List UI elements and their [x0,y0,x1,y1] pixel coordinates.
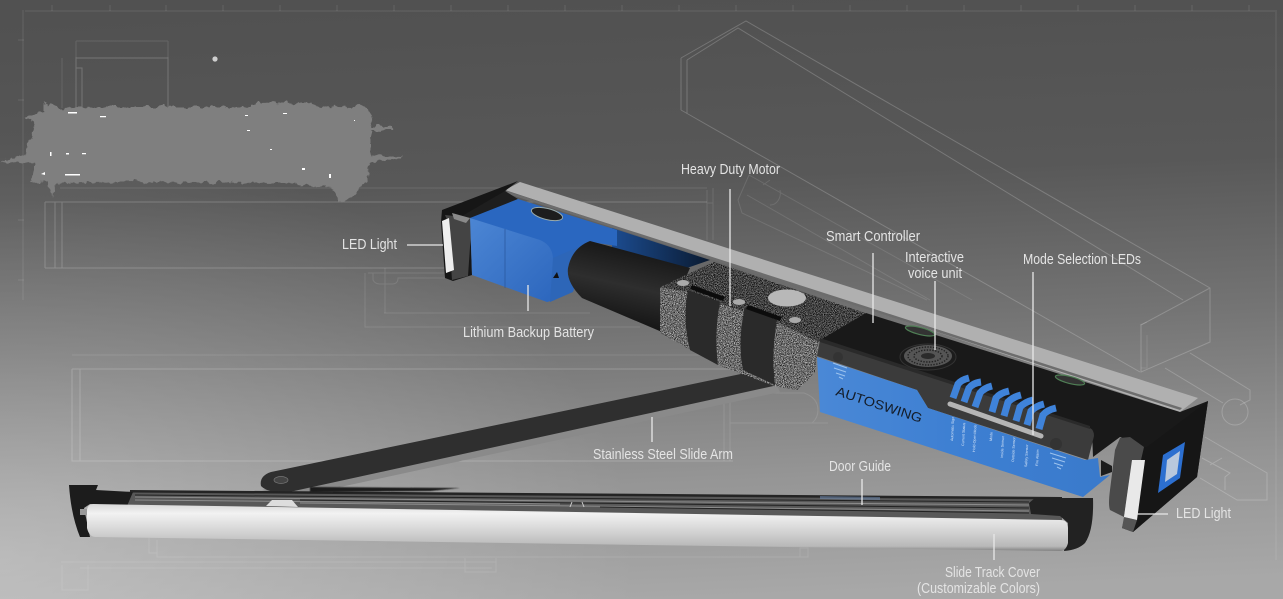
slide track: right end cap [1029,498,1093,551]
mode selection LED tabs [953,378,1056,429]
slide track: inner door guide [127,487,1062,525]
label: LED Light (left) [342,236,443,253]
mode selection LED bar [950,404,1041,436]
green indicators [905,324,1085,387]
label: Stainless Steel Slide Arm: Stainless Steel Slide Arm [593,446,733,463]
erased title area: grey blotch [0,56,402,202]
gearbox block with bands [660,262,868,390]
slide track: left end cap [69,485,133,537]
label: Door Guide [829,458,891,505]
label: Door Guide: Door Guide [829,458,891,475]
label: Slide Track Cover [917,534,1040,597]
label: Stainless Steel Slide Arm [593,417,733,463]
mode labels on blue panel: Safety Sensor [1024,443,1029,467]
label: Smart Controller [826,228,920,323]
interactive voice unit speaker [900,344,956,370]
mode labels on blue panel: Outside Sensor [1011,436,1016,462]
label: Slide Track Cover: Slide Track Cover [945,564,1040,581]
label: Interactive voice unit: Interactive [905,249,964,266]
label: LED Light (right): LED Light [1176,505,1232,522]
label: Lithium Backup Battery [463,285,594,341]
left end cap and LED light [441,181,518,281]
mode labels on blue panel [950,417,1040,467]
label: Mode Selection LEDs: Mode Selection LEDs [1023,251,1141,268]
label: Slide Track Cover: (Customizable Colors) [917,580,1040,597]
label: Interactive voice unit: voice unit [908,265,963,282]
mode labels on blue panel: Current Status [961,423,966,446]
AUTOSWING logo: AUTOSWING [834,384,924,426]
mode labels on blue panel: Automatic Sign [950,417,955,441]
smart controller black housing [817,313,1208,532]
mode labels on blue panel: Mode [989,432,993,441]
right detached end cap with LED light [1109,401,1208,532]
main housing: silver top rail [505,182,1198,412]
blue front panel [817,357,1112,497]
label: LED Light (left): LED Light [342,236,398,253]
slide track cover [87,504,1068,551]
blueprint line drawing: angled isometric view [681,21,1267,500]
lithium backup battery (blue) [470,199,710,302]
mode labels on blue panel: Hold-Open Mode [972,425,977,452]
label: Interactive voice unit [905,249,964,350]
mode labels on blue panel: Inside Sensor [1000,435,1005,458]
label: Heavy Duty Motor: Heavy Duty Motor [681,161,780,178]
label: Lithium Backup Battery: Lithium Backup Battery [463,324,594,341]
slide arm [261,370,790,503]
label: LED Light (right) [1130,505,1232,522]
motor cylinder [568,241,690,332]
mode labels on blue panel: Fire Alarm [1035,449,1040,466]
label: Smart Controller: Smart Controller [826,228,920,245]
